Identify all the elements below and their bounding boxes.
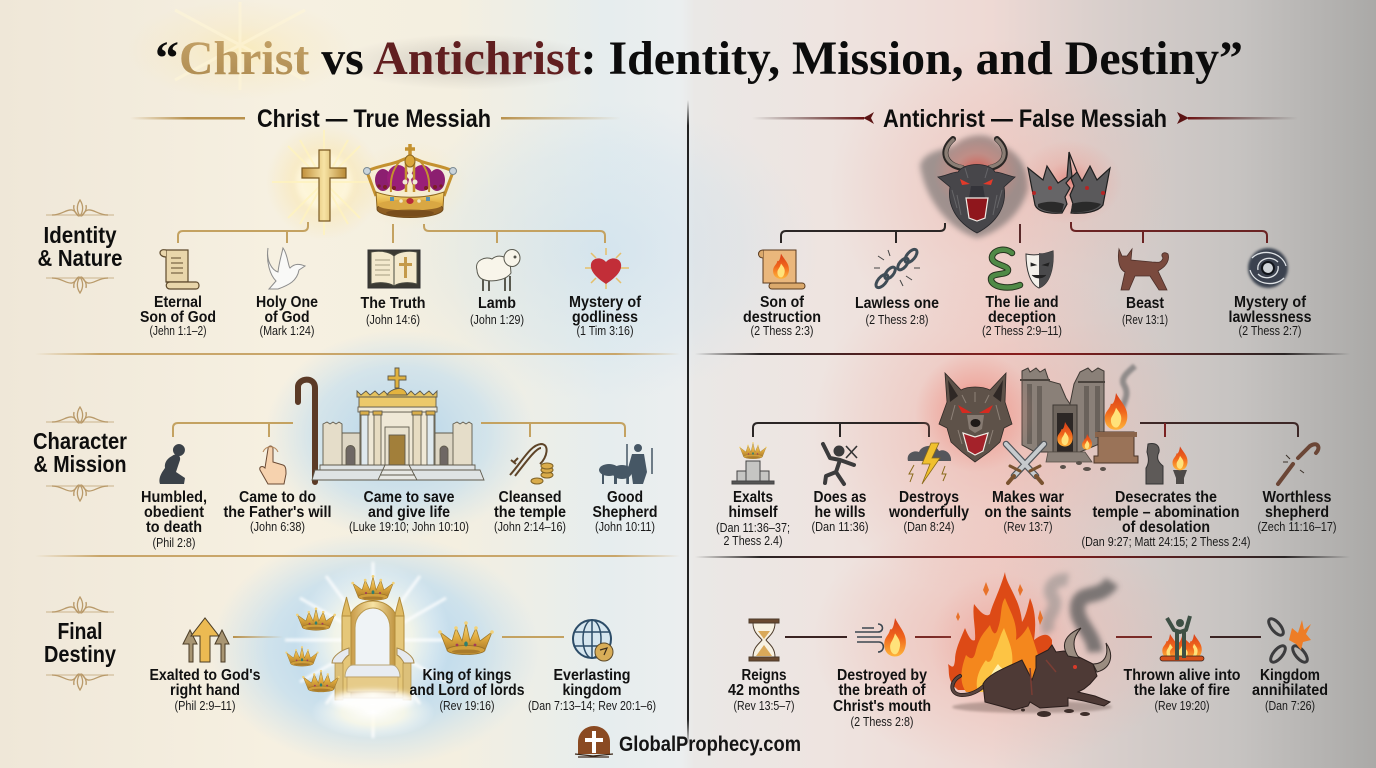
item: Mystery of lawlessness: Mystery of [1234, 294, 1307, 311]
panel: Christ destiny [150, 562, 656, 738]
item: Eternal Son of God: (Jehn 1:1–2) [150, 324, 206, 338]
item: Son of destruction [743, 250, 821, 338]
connector tree [753, 423, 1298, 437]
row label: Final Destiny [44, 597, 116, 690]
item: Came to do the Father's will: the Father's will [224, 504, 332, 521]
icon: lamb [477, 250, 520, 291]
icon: crown on podium [739, 442, 767, 459]
icon: shepherd and sheep [599, 444, 652, 484]
item: Good Shepherd: Good [607, 489, 643, 506]
item: Son of destruction: (2 Thess 2:3) [750, 324, 814, 338]
item: Exalted [150, 618, 261, 713]
item: The lie and deception: The lie and [986, 294, 1058, 311]
icon: pointing hand [260, 446, 286, 484]
icon: broken staff [1278, 444, 1318, 484]
icon: beast silhouette [1118, 249, 1169, 290]
item: Holy One of God: of God [264, 309, 310, 326]
footer logo: GlobalProphecy.com [575, 726, 801, 757]
item: Good Shepherd: (John 10:11) [595, 520, 655, 534]
icon: defiant figure [823, 444, 854, 484]
item: Came to save: Came to save [364, 489, 455, 506]
connector [1210, 636, 1261, 638]
item: The Truth: (John 14:6) [366, 313, 420, 327]
panel: Christ column heading: Christ — True Messiah [257, 105, 491, 133]
item: Eternal Son of God: Son of God [140, 309, 216, 326]
icon: wolf head [915, 352, 1035, 472]
item: Exalts himself: himself [728, 504, 778, 521]
item: Son of destruction: destruction [743, 309, 821, 326]
item: Makes war on the saints: on the saints [984, 504, 1072, 521]
item: Mystery of godliness: (1 Tim 3:16) [576, 324, 634, 338]
item: Thrown alive into the lake of fire: Thrown alive into [1124, 667, 1241, 684]
item: Good Shepherd [592, 444, 658, 534]
icon: whip and coins [510, 444, 547, 476]
item: Desecrates the temple: temple – abomination [1092, 504, 1240, 521]
item: The lie and deception: deception [988, 309, 1056, 326]
connector tree [178, 222, 605, 243]
row label: Character & Mission: & Mission [34, 451, 126, 477]
title [125, 0, 1243, 100]
item: The lie and deception: (2 Thess 2:9–11) [982, 324, 1062, 338]
title: “Christ vs Antichrist: Identity, Mission, and Destiny” [155, 32, 1243, 85]
connector [785, 636, 847, 638]
icon: breath and flame [855, 624, 883, 652]
icon: ruined temple [1020, 368, 1106, 471]
item: Humbled: Humbled, [141, 489, 207, 506]
connector tree [173, 423, 625, 437]
item: Destroyed by breath [833, 618, 931, 729]
item: Destroys wonderfully: (Dan 8:24) [904, 520, 954, 534]
item: The lie and deception [982, 250, 1062, 338]
icon: serpent and mask [991, 250, 1020, 287]
icon: burning beast in the lake of fire [930, 572, 1112, 717]
icon: burning scroll [758, 250, 805, 289]
item: Reigns 42 months: (Rev 13:5–7) [734, 699, 794, 713]
item: Beast: (Rev 13:1) [1122, 313, 1168, 327]
item: Destroys wonderfully: Destroys [899, 489, 959, 506]
connector [915, 636, 951, 638]
center divider line [687, 100, 689, 745]
item: Exalted: Exalted to God's [150, 667, 261, 684]
icon: radiant heart [585, 248, 629, 289]
item: Destroyed by breath: (2 Thess 2:8) [850, 715, 914, 729]
row label: Identity & Nature: Identity [44, 222, 117, 248]
connector tree [781, 222, 1267, 243]
item: Exalted: right hand [170, 682, 240, 699]
item: King of kings: and Lord of lords [410, 682, 525, 699]
item: Humbled: obedient [144, 504, 205, 521]
item: Cleansed the temple: (John 2:14–16) [494, 520, 566, 534]
item: Kingdom annihilated: (Dan 7:26) [1265, 699, 1315, 713]
icon: smoke [1121, 366, 1135, 420]
item: Everlasting kingdom [528, 620, 656, 713]
item: Reigns 42 months: Reigns [742, 667, 787, 684]
icon: crossed swords [1006, 444, 1044, 483]
icon: jewelled crown [438, 621, 494, 654]
item: Came to save [312, 368, 484, 534]
item: Lawless one: (2 Thess 2:8) [866, 313, 928, 327]
item: Everlasting kingdom: (Dan 7:13–14; Rev 20:1–6) [528, 699, 656, 713]
item: Everlasting kingdom: kingdom [562, 682, 622, 699]
item: Holy One of God: Holy One [256, 294, 318, 311]
item: Destroyed by breath: Destroyed by [837, 667, 927, 684]
icon: horned beast head in smoke [920, 134, 1028, 238]
item: Worthless shepherd: shepherd [1265, 504, 1329, 521]
item: Destroys wonderfully: wonderfully [888, 504, 969, 521]
item: Desecrates the temple [1082, 443, 1250, 549]
panel: Antichrist column heading: Antichrist — False Messiah [883, 105, 1167, 133]
item: Cleansed the temple: Cleansed [498, 489, 562, 506]
item: Reigns 42 months [728, 619, 800, 713]
item: Came to do the Father's will [224, 446, 332, 534]
item: Eternal Son of God [140, 250, 216, 338]
item: Mystery of lawlessness [1228, 248, 1312, 338]
icon: dove [267, 248, 305, 289]
item: Worthless shepherd: Worthless [1262, 489, 1332, 506]
item: Came to save: and give life [368, 504, 450, 521]
panel: Christ character [141, 368, 658, 550]
item: The Truth: The Truth [360, 295, 426, 312]
connector [233, 636, 283, 638]
item: Kingdom annihilated: annihilated [1252, 682, 1328, 699]
item: Thrown alive into the lake of fire [1124, 616, 1241, 713]
icon: kneeling figure [159, 444, 185, 484]
item: Mystery of lawlessness: lawlessness [1228, 309, 1312, 326]
item: Desecrates the temple: (Dan 9:27; Matt 24:15; 2 Thess 2:4) [1082, 535, 1250, 549]
item: Does as he wills [812, 444, 868, 534]
row label: Character & Mission: Character [33, 428, 127, 454]
item: Desecrates the temple: of desolation [1122, 519, 1210, 536]
item: Kingdom annihilated [1252, 616, 1328, 713]
item: Mystery of lawlessness: (2 Thess 2:7) [1238, 324, 1302, 338]
item: Reigns 42 months: 42 months [728, 682, 800, 699]
item: Destroyed by breath: Christ's mouth [833, 698, 931, 715]
item: Exalts himself: (Dan 11:36–37; [716, 521, 790, 535]
item: King of kings: King of kings [422, 667, 512, 684]
row label: Identity & Nature: & Nature [38, 245, 122, 271]
icon: figure in flames [1160, 616, 1204, 661]
icon: storm cloud and lightning [908, 446, 951, 461]
item: Beast [1118, 249, 1169, 327]
item: Thrown alive into the lake of fire: (Rev 19:20) [1154, 699, 1210, 713]
row label: Character & Mission [33, 407, 127, 501]
item: Mystery of godliness: godliness [572, 309, 638, 326]
item: Cleansed the temple [494, 444, 566, 534]
icon: shepherd staff [298, 380, 315, 482]
item: King of kings: (Rev 19:16) [440, 699, 494, 713]
icon: scroll [160, 250, 199, 289]
icon: broken chain [874, 247, 919, 290]
item: King of kings [410, 621, 525, 713]
item: Humbled [141, 444, 207, 550]
item: Exalts himself [716, 442, 790, 548]
item: Cleansed the temple: the temple [494, 504, 566, 521]
item: Worthless shepherd [1258, 444, 1336, 534]
icon: glowing cross [266, 124, 382, 240]
item: Lawless one: Lawless one [855, 295, 939, 312]
item: Mystery of godliness: Mystery of [569, 294, 642, 311]
panel: Antichrist identity [743, 134, 1312, 338]
icon: globe with seal [573, 620, 613, 661]
item: Good Shepherd: Shepherd [592, 504, 658, 521]
item: The Truth [360, 250, 426, 327]
item: Came to do the Father's will: Came to do [239, 489, 316, 506]
item: Humbled: (Phil 2:8) [152, 536, 196, 550]
item: Makes war on the saints: Makes war [992, 489, 1064, 506]
item: Thrown alive into the lake of fire: the lake of fire [1134, 682, 1230, 699]
item: Lamb: (John 1:29) [470, 313, 524, 327]
item: Lawless one [855, 247, 939, 327]
icon: hourglass [749, 619, 779, 661]
item: Does as he wills: (Dan 11:36) [812, 520, 868, 534]
panel: Christ identity [140, 124, 642, 338]
row label: Identity & Nature [38, 200, 122, 293]
row label: Final Destiny: Destiny [44, 641, 116, 667]
item: Desecrates the temple: Desecrates the [1115, 489, 1217, 506]
panel: Antichrist destiny [728, 572, 1328, 729]
item: Does as he wills: Does as [814, 489, 867, 506]
item: Everlasting kingdom: Everlasting [554, 667, 630, 684]
icon: broken dark crown [1018, 140, 1122, 224]
item: Makes war on the saints [984, 444, 1072, 534]
item: Kingdom annihilated: Kingdom [1260, 667, 1320, 684]
footer logo: GlobalProphecy.com: GlobalProphecy.com [619, 733, 801, 756]
icon: temple [312, 368, 484, 480]
item: Destroys wonderfully [888, 443, 969, 534]
icon: rising arrows [183, 618, 229, 662]
section dividers [35, 353, 1350, 558]
item: Lamb [470, 250, 524, 327]
connector [1116, 636, 1152, 638]
item: Eternal Son of God: Eternal [154, 294, 202, 311]
item: Makes war on the saints: (Rev 13:7) [1004, 520, 1052, 534]
icon: broken chain with burst [1266, 616, 1310, 665]
item: Exalted: (Phil 2:9–11) [174, 699, 236, 713]
item: Holy One of God [256, 248, 318, 338]
panel: Antichrist character [716, 352, 1336, 549]
item: Came to do the Father's will: (John 6:38) [250, 520, 305, 534]
icon: open Bible [368, 250, 420, 288]
icon: burning altar [1094, 393, 1138, 463]
item: Beast: Beast [1126, 295, 1165, 312]
item: Exalts himself: Exalts [733, 489, 773, 506]
item: Holy One of God: (Mark 1:24) [260, 324, 314, 338]
icon: dark vortex [1248, 248, 1288, 288]
icon: royal crown [352, 140, 468, 230]
item: Mystery of godliness [569, 248, 642, 338]
icon: broken idol and fire [1146, 443, 1188, 484]
item: Destroyed by breath: the breath of [838, 682, 926, 699]
item: Does as he wills: he wills [814, 504, 866, 521]
item: Son of destruction: Son of [760, 294, 805, 311]
connector [502, 636, 564, 638]
icon: radiant throne with crowns [285, 562, 460, 738]
item: Exalts himself: 2 Thess 2.4) [724, 534, 782, 548]
row label: Final Destiny: Final [58, 618, 102, 644]
item: Worthless shepherd: (Zech 11:16–17) [1258, 520, 1336, 534]
panel: Antichrist column heading [752, 105, 1298, 133]
item: Lamb: Lamb [478, 295, 516, 312]
item: Came to save: (Luke 19:10; John 10:10) [349, 520, 469, 534]
item: Humbled: to death [146, 519, 202, 536]
